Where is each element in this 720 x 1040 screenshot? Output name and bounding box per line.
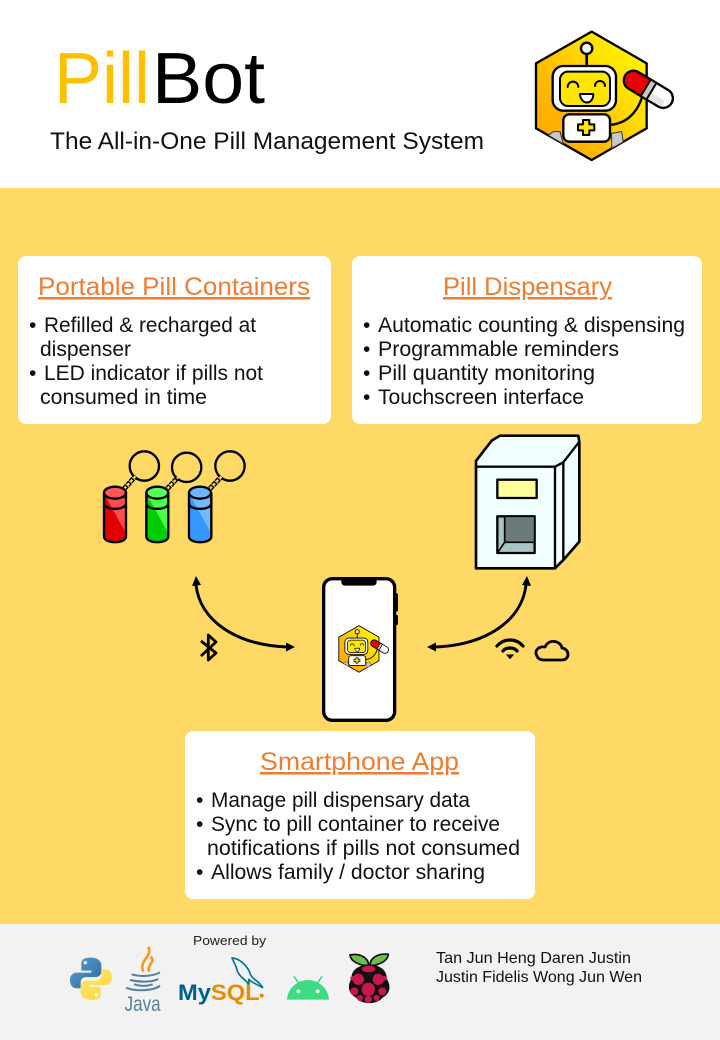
icon: wifi bbox=[497, 640, 523, 658]
text block: dispensary features: Touchscreen interface bbox=[378, 386, 584, 409]
text block: app features bbox=[196, 789, 520, 884]
text block: container features: dispenser bbox=[40, 338, 131, 361]
text block: app features: • bbox=[196, 813, 203, 836]
text block: app features: notifications if pills not consumed bbox=[207, 837, 520, 860]
logo: mysql bbox=[178, 958, 264, 1005]
logo: python bbox=[70, 958, 112, 1000]
panel: portable pill containers bbox=[18, 256, 331, 424]
credits text bbox=[436, 950, 642, 986]
text block: dispensary features: • bbox=[363, 314, 370, 337]
credits text: Justin Fidelis Wong Jun Wen bbox=[436, 969, 642, 986]
container: green bbox=[146, 453, 201, 542]
footer band bbox=[0, 924, 720, 1040]
arrow: dispenser to phone bbox=[427, 576, 531, 652]
title: Bot bbox=[152, 39, 265, 119]
arrow: containers to phone bbox=[192, 576, 295, 652]
title bbox=[54, 39, 265, 119]
heading: portable pill containers: Portable Pill Containers bbox=[38, 273, 310, 301]
panel: smartphone app bbox=[185, 731, 535, 899]
text block: container features: LED indicator if pills not bbox=[44, 362, 263, 385]
text block: container features: Refilled & recharged at bbox=[44, 314, 256, 337]
icon: bluetooth bbox=[201, 635, 216, 660]
text block: container features: • bbox=[29, 362, 36, 385]
text block: app features: • bbox=[196, 861, 203, 884]
icon: smartphone bbox=[324, 579, 398, 720]
text block: app features: Manage pill dispensary data bbox=[211, 789, 470, 812]
text block: container features: consumed in time bbox=[40, 386, 207, 409]
text block: dispensary features bbox=[363, 314, 685, 409]
text block: app features: • bbox=[196, 789, 203, 812]
panel: pill dispensary bbox=[352, 256, 702, 424]
credits text: Tan Jun Heng Daren Justin bbox=[436, 950, 631, 967]
logo: java bbox=[125, 947, 161, 1016]
icon: pill dispenser machine bbox=[476, 436, 579, 568]
powered by label: Powered by bbox=[193, 933, 267, 948]
text block: app features: Sync to pill container to receive bbox=[211, 813, 500, 836]
logo: android bbox=[287, 976, 329, 1000]
container: blue bbox=[189, 451, 245, 542]
text block: dispensary features: • bbox=[363, 362, 370, 385]
text block: dispensary features: Programmable reminders bbox=[378, 338, 619, 361]
icon: pill containers with key rings bbox=[104, 451, 245, 542]
yellow main band bbox=[0, 188, 720, 924]
text block: dispensary features: Pill quantity monitoring bbox=[378, 362, 595, 385]
icon: robot logo on phone bbox=[339, 626, 390, 672]
icon: cloud bbox=[536, 641, 568, 660]
title: Pill bbox=[54, 39, 150, 119]
logo: mysql: MySQL bbox=[178, 980, 260, 1005]
container: red bbox=[104, 451, 159, 542]
logo: java: Java bbox=[125, 992, 161, 1016]
icon: robot logo bbox=[536, 32, 676, 160]
text block: container features bbox=[29, 314, 263, 409]
text block: app features: Allows family / doctor sharing bbox=[211, 861, 485, 884]
text block: container features: • bbox=[29, 314, 36, 337]
logo: raspberry pi bbox=[349, 954, 390, 1003]
heading: pill dispensary: Pill Dispensary bbox=[443, 273, 612, 301]
subtitle: The All-in-One Pill Management System bbox=[50, 128, 484, 155]
heading: smartphone app: Smartphone App bbox=[260, 748, 459, 776]
text block: dispensary features: Automatic counting & dispensing bbox=[378, 314, 685, 337]
text block: dispensary features: • bbox=[363, 338, 370, 361]
text block: dispensary features: • bbox=[363, 386, 370, 409]
